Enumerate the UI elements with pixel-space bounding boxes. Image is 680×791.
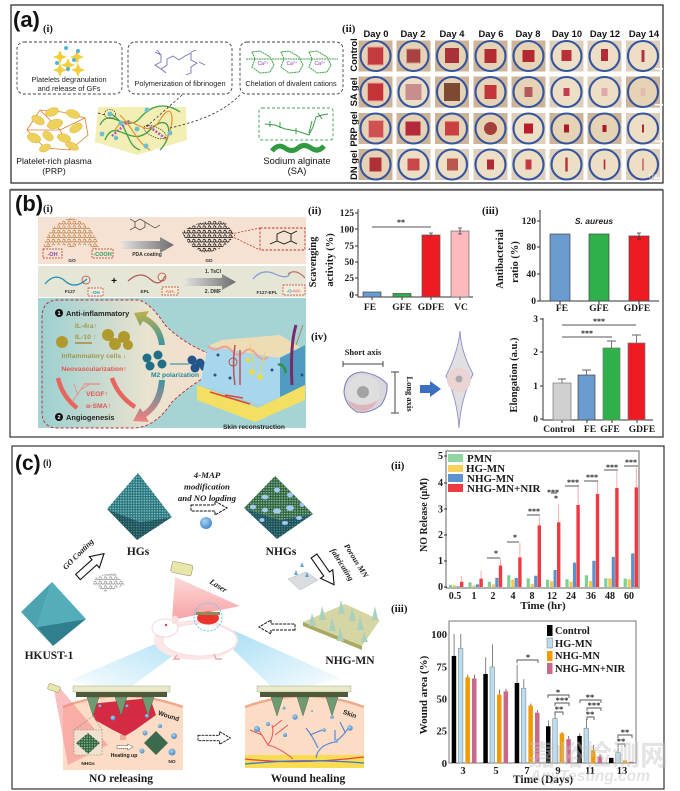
chart: NO release: *** — [567, 478, 579, 487]
scheme band: F127-EPL synthesis — [38, 266, 306, 297]
chart: cell elongation: 2 — [533, 348, 538, 358]
chart: wound area: *** — [556, 695, 568, 705]
scheme band: anti-inflammatory and angiogenesis mechanism: α-SMA↑ — [86, 403, 111, 410]
illustration: laser on mouse: Laser — [207, 577, 229, 595]
scheme band: anti-inflammatory and angiogenesis mechanism: Angiogenesis — [66, 413, 114, 422]
arrow: 4-MAP modification: modification — [184, 482, 230, 492]
text: NO releasing: NO releasing — [89, 773, 153, 785]
scheme band: anti-inflammatory and angiogenesis mechanism: 1 — [57, 311, 61, 317]
chart: scavenging activity: ** — [397, 218, 405, 227]
chart: NO release: * — [554, 494, 558, 503]
chart: wound area: ** — [586, 709, 594, 719]
icon: HGs octahedron — [107, 473, 172, 540]
chart: NO release: * — [513, 533, 517, 542]
scheme band: F127-EPL synthesis: -O-NH- — [287, 288, 302, 294]
chart: wound area: 13 — [617, 766, 627, 777]
scene: wound healing: Skin — [342, 709, 357, 720]
icon: NHG-MN patch — [303, 600, 380, 650]
scheme band: F127-EPL synthesis: 1. TsCl — [205, 269, 222, 275]
scheme band: PDA coating of GO: -COOH — [93, 252, 112, 258]
text: HKUST-1: HKUST-1 — [25, 650, 74, 662]
chart: NO release: 60 — [624, 591, 634, 602]
chart: NO release: *** — [528, 507, 540, 516]
chart: wound area: 75 — [436, 662, 447, 674]
group row labels — [348, 38, 359, 180]
panel: (b) GDFE hydrogel — [10, 190, 663, 437]
diagram: cell elongation axes: Short axis — [345, 347, 382, 357]
chart: wound area: ** — [586, 692, 594, 702]
illustration: platelet-rich plasma — [26, 106, 88, 154]
chart: antibacterial ratio: ratio (%) — [510, 241, 521, 283]
chart: NO release: *** — [606, 463, 618, 472]
day labels: Day 8 — [515, 28, 541, 39]
illustration: sodium alginate — [259, 108, 333, 151]
chart: NO release: *** — [547, 488, 559, 497]
chart: NO release: 2 — [438, 530, 443, 541]
scheme band: anti-inflammatory and angiogenesis mechanism: IL-10 ↑ — [75, 334, 96, 341]
chart: NO release: 5 — [438, 451, 443, 462]
illustration: double network gel block — [95, 95, 240, 155]
day labels: Day 10 — [552, 28, 582, 39]
arrow: releasing to healing — [198, 732, 230, 744]
label (ii): (ii) — [308, 205, 322, 217]
scheme band: F127-EPL synthesis: 2. DMF — [205, 289, 221, 295]
text: platelet-rich plasma: Platelet-rich plasma — [16, 156, 92, 166]
chart: NO release: 24 — [566, 591, 576, 602]
arrow: porous MN fabricating — [288, 542, 371, 590]
text: sodium alginate: Sodium alginate — [263, 155, 331, 166]
chart: NO release: 0.5 — [449, 591, 461, 602]
chart: wound area: 5 — [493, 766, 499, 777]
chart: NO release: 36 — [586, 591, 596, 602]
chart: NO release: 48 — [605, 591, 615, 602]
box: platelets degranulation: and release of GFs — [38, 84, 101, 93]
chart: wound area: 50 — [436, 694, 447, 706]
panel: (a) hydrogel wound closure — [10, 5, 663, 190]
chart: NO release: 12 — [547, 591, 557, 602]
chart: wound area: *** — [588, 700, 600, 710]
box: polymerization of fibrinogen — [128, 42, 232, 94]
chart: NO release: 4 — [438, 478, 443, 489]
label (ii): (ii) — [391, 460, 405, 472]
group row labels: DN gel — [348, 150, 359, 180]
scheme band: PDA coating of GO: -OH — [47, 252, 58, 258]
legend: NO release: NHG-MN+NIR — [467, 483, 542, 495]
legend: wound area: NHG-MN — [555, 651, 600, 662]
chart: wound area: Time (Days) — [513, 774, 573, 786]
label (b): (b) — [15, 191, 43, 216]
box: platelets degranulation: Platelets degranulation — [31, 75, 107, 84]
chart: scavenging activity: 50 — [344, 258, 354, 268]
arrow: 4-MAP modification: 4-MAP — [193, 470, 221, 480]
scheme band: PDA coating of GO: PDA coating — [132, 252, 162, 258]
chart: NO release: NO Release (μM) — [419, 478, 430, 552]
label (iv): (iv) — [311, 331, 327, 343]
chart: cell elongation: Control — [543, 425, 575, 435]
chart: scavenging activity: activity (%) — [325, 233, 336, 287]
chart: antibacterial ratio: Antibacterial — [495, 229, 506, 289]
chart: NO release: 4 — [510, 591, 516, 602]
arrow: porous MN fabricating: fabricating — [329, 547, 356, 583]
chart: wound area: ** — [617, 736, 625, 746]
chart: antibacterial ratio: GDFE — [624, 304, 650, 314]
day labels: Day 0 — [363, 28, 389, 39]
scene: NO releasing: Heating up — [111, 753, 137, 759]
chart: cell elongation: *** — [593, 317, 605, 326]
day labels: Day 14 — [629, 28, 660, 39]
scheme band: F127-EPL synthesis: -OH — [91, 290, 100, 296]
label (i): (i) — [43, 458, 52, 468]
chart: cell elongation: GFE — [600, 425, 620, 435]
chart: cell elongation: *** — [581, 329, 593, 338]
box: chelation of divalent cations: Ca²⁺ — [286, 61, 298, 67]
text: NHGs: NHGs — [266, 546, 297, 558]
label (c): (c) — [15, 452, 41, 475]
icon: NHGs octahedron — [244, 476, 313, 539]
scheme band: F127-EPL synthesis: F127 — [65, 289, 76, 294]
illustration: laser on mouse — [70, 561, 340, 695]
arrow: 4-MAP modification — [178, 470, 237, 529]
caption: skin reconstruction: Skin reconstruction — [223, 424, 285, 431]
scene: NO releasing — [47, 683, 183, 770]
watermark: 嘉峪检测网 — [528, 734, 668, 774]
legend: wound area: Control — [555, 626, 590, 637]
scheme band: F127-EPL synthesis: + — [111, 276, 117, 287]
chart: NO release: *** — [625, 458, 637, 467]
chart: cell elongation: GDFE — [629, 425, 655, 435]
chart: cell elongation — [509, 315, 655, 435]
chart: wound area: ** — [621, 727, 629, 737]
chart: antibacterial ratio: 120 — [522, 217, 536, 227]
chart: scavenging activity: 100 — [340, 226, 354, 236]
arrow: porous MN fabricating: Porous MN — [342, 542, 371, 580]
chart: NO release: 2 — [490, 591, 496, 602]
chart: wound area: 100 — [431, 630, 447, 641]
chart: NO release: * — [494, 549, 498, 558]
chart: wound area: 9 — [555, 766, 561, 777]
diagram: cell elongation axes — [343, 331, 473, 428]
legend: NO release: PMN — [467, 453, 492, 465]
arrow: GO coating: GO Coating — [61, 537, 95, 571]
text: platelet-rich plasma — [16, 156, 92, 176]
chart: wound area: 0 — [442, 759, 447, 770]
legend: NO release: NHG-MN — [467, 473, 514, 485]
chart: scavenging activity: Scavenging — [308, 236, 319, 287]
chart: antibacterial ratio: S. aureus — [575, 216, 613, 226]
arrow: 4-MAP modification: and NO loading — [178, 493, 237, 503]
scheme band: F127-EPL synthesis: EPL — [141, 289, 150, 294]
scene: NO releasing: NHGs — [81, 761, 95, 767]
legend: NO release — [448, 453, 542, 495]
box: chelation of divalent cations: Ca²⁺ — [314, 61, 326, 67]
scene: NO releasing: NO — [168, 759, 176, 765]
chart: wound area — [418, 621, 636, 786]
box: chelation of divalent cations — [240, 42, 343, 94]
text: sodium alginate — [263, 155, 331, 176]
chart: antibacterial ratio: 40 — [526, 270, 536, 280]
text: sodium alginate: (SA) — [288, 165, 306, 176]
chart: wound area: 25 — [436, 726, 447, 738]
chart: scavenging activity: 125 — [340, 209, 354, 219]
box: polymerization of fibrinogen: Polymerization of fibrinogen — [134, 79, 226, 88]
panel: (c) NO-releasing microneedle — [12, 446, 664, 789]
chart: scavenging activity: 25 — [344, 274, 354, 284]
chart: NO release: 1 — [472, 591, 476, 602]
scheme band: anti-inflammatory and angiogenesis mechanism: Anti-inflammatory — [66, 309, 130, 318]
text: HGs: HGs — [127, 546, 150, 558]
chart: wound area: 7 — [524, 766, 530, 777]
legend: NO release: HG-MN — [466, 463, 505, 475]
chart: antibacterial ratio: GFE — [589, 304, 609, 314]
watermark: AnyTesting.com — [529, 768, 650, 785]
scene: NO releasing: Wound — [157, 710, 180, 723]
legend: wound area — [547, 625, 626, 675]
chart: wound area: 3 — [460, 766, 466, 777]
scene: wound healing — [245, 686, 364, 768]
chart: scavenging activity: GDFE — [418, 303, 444, 313]
chart: scavenging activity: VC — [454, 303, 468, 313]
chart: NO release: 8 — [530, 591, 534, 602]
chart: NO release: 0 — [438, 582, 443, 593]
photo grid: wound closure: 1 cm — [648, 174, 659, 180]
label (iii): (iii) — [482, 205, 499, 217]
diagram: cell elongation axes: Long axis — [405, 376, 415, 412]
chart: NO release: Time (hr) — [520, 600, 566, 612]
group row labels: PRP gel — [348, 111, 359, 147]
chart: NO release: *** — [586, 473, 598, 482]
chart: antibacterial ratio: FE — [556, 304, 568, 314]
legend: wound area: NHG-MN+NIR — [555, 664, 626, 675]
text: platelet-rich plasma: (PRP) — [42, 166, 66, 176]
text: wound healing: Wound healing — [271, 773, 345, 785]
scheme band: anti-inflammatory and angiogenesis mechanism: M2 polarization — [151, 372, 199, 379]
label (i): (i) — [43, 204, 53, 215]
scheme band: anti-inflammatory and angiogenesis mechanism: Inflammatory cells ↓ — [62, 353, 126, 360]
chart: antibacterial ratio: 0 — [531, 297, 536, 307]
day labels: Day 2 — [400, 28, 426, 39]
scheme band: anti-inflammatory and angiogenesis mechanism: Neovascularization↑ — [61, 366, 127, 373]
day labels: Day 6 — [478, 28, 504, 39]
day labels — [363, 28, 660, 39]
chart: cell elongation: Elongation (a.u.) — [509, 337, 520, 412]
arrow: patch to mouse — [259, 620, 295, 634]
day labels: Day 4 — [439, 28, 465, 39]
chart: wound area: * — [556, 687, 560, 697]
chart: cell elongation: 0 — [533, 415, 538, 425]
group row labels: Control — [348, 38, 359, 72]
scheme band: F127-EPL synthesis: F127-EPL — [257, 290, 278, 295]
arrow: GO coating — [61, 537, 125, 592]
chart: scavenging activity: 75 — [344, 242, 354, 252]
chart: NO release: 1 — [438, 556, 443, 567]
scheme band: F127-EPL synthesis: -NH₂ — [165, 289, 175, 295]
chart: scavenging activity: GFE — [392, 303, 412, 313]
label (a): (a) — [13, 7, 40, 32]
chart: cell elongation: 3 — [533, 315, 538, 325]
chart: scavenging activity — [308, 209, 473, 313]
scheme band: anti-inflammatory and angiogenesis mechanism — [38, 298, 306, 428]
chart: scavenging activity: 0 — [349, 291, 354, 301]
chart: antibacterial ratio — [495, 210, 659, 314]
scheme band: anti-inflammatory and angiogenesis mechanism: 2 — [57, 415, 61, 421]
scheme band: anti-inflammatory and angiogenesis mechanism: VEGF↑ — [86, 391, 108, 398]
chart: wound area: * — [526, 652, 530, 662]
icon: HKUST-1 octahedron — [21, 582, 86, 646]
scheme band: PDA coating of GO — [38, 217, 306, 264]
day labels: Day 12 — [590, 28, 620, 39]
chart: wound area: ** — [555, 704, 563, 714]
label (ii): (ii) — [342, 23, 356, 35]
scheme band: PDA coating of GO: GO — [68, 258, 76, 264]
box: chelation of divalent cations: Chelation of divalent cations — [245, 79, 337, 88]
label (iii): (iii) — [391, 603, 408, 615]
chart: wound area: Wound area (%) — [418, 655, 430, 734]
chart: NO release: 3 — [438, 504, 443, 516]
chart: scavenging activity: FE — [364, 303, 376, 313]
chart: cell elongation: FE — [584, 425, 596, 435]
chart: cell elongation: 1 — [533, 382, 538, 392]
box: platelets degranulation — [17, 42, 122, 94]
legend: wound area: HG-MN — [555, 639, 593, 650]
photo grid: wound closure — [358, 40, 663, 180]
text: NHG-MN: NHG-MN — [325, 655, 375, 667]
chart: wound area: 11 — [585, 766, 595, 777]
box: chelation of divalent cations: Ca²⁺ — [257, 61, 269, 67]
scheme band: PDA coating of GO: GD — [205, 258, 213, 264]
scheme band: anti-inflammatory and angiogenesis mechanism: IL-4ra↑ — [75, 323, 97, 330]
group row labels: SA gel — [348, 78, 359, 106]
chart: antibacterial ratio: 80 — [526, 243, 536, 253]
chart: NO release — [419, 451, 639, 612]
label (i): (i) — [43, 24, 53, 35]
